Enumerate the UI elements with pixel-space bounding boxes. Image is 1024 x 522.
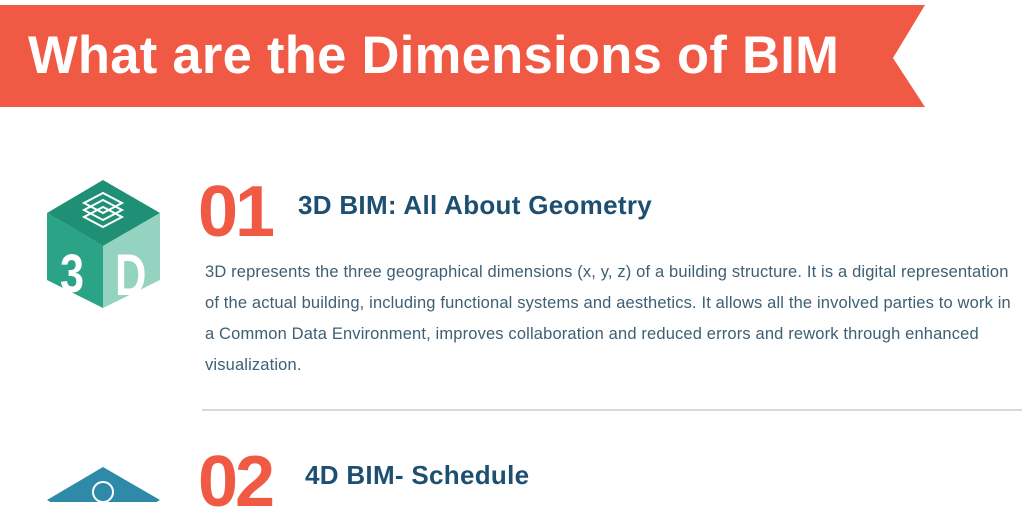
icon: 3D cube	[47, 180, 160, 308]
section 01 body text: of the actual building, including functional systems and aesthetics. It allows all the involved parties to work in	[205, 294, 1011, 312]
section 02 heading: 4D BIM- Schedule	[305, 460, 529, 490]
icon: 3D cube: D	[115, 243, 146, 307]
section 01 number: 01	[198, 172, 272, 252]
section 02 number: 02	[198, 442, 272, 522]
section 01 heading: 3D BIM: All About Geometry	[298, 190, 652, 220]
icon: 3D cube: 3	[60, 245, 84, 304]
title: What are the Dimensions of BIM	[28, 26, 839, 85]
section 01 body text	[205, 263, 1011, 374]
section 01 body text: visualization.	[205, 356, 302, 374]
icon: 4D cube	[47, 467, 160, 502]
title banner	[0, 5, 925, 107]
section 01 body text: a Common Data Environment, improves collaboration and reduced errors and rework through enhanced	[205, 325, 979, 343]
section 01 body text: 3D represents the three geographical dimensions (x, y, z) of a building structure. It is a digital representation	[205, 263, 1009, 281]
